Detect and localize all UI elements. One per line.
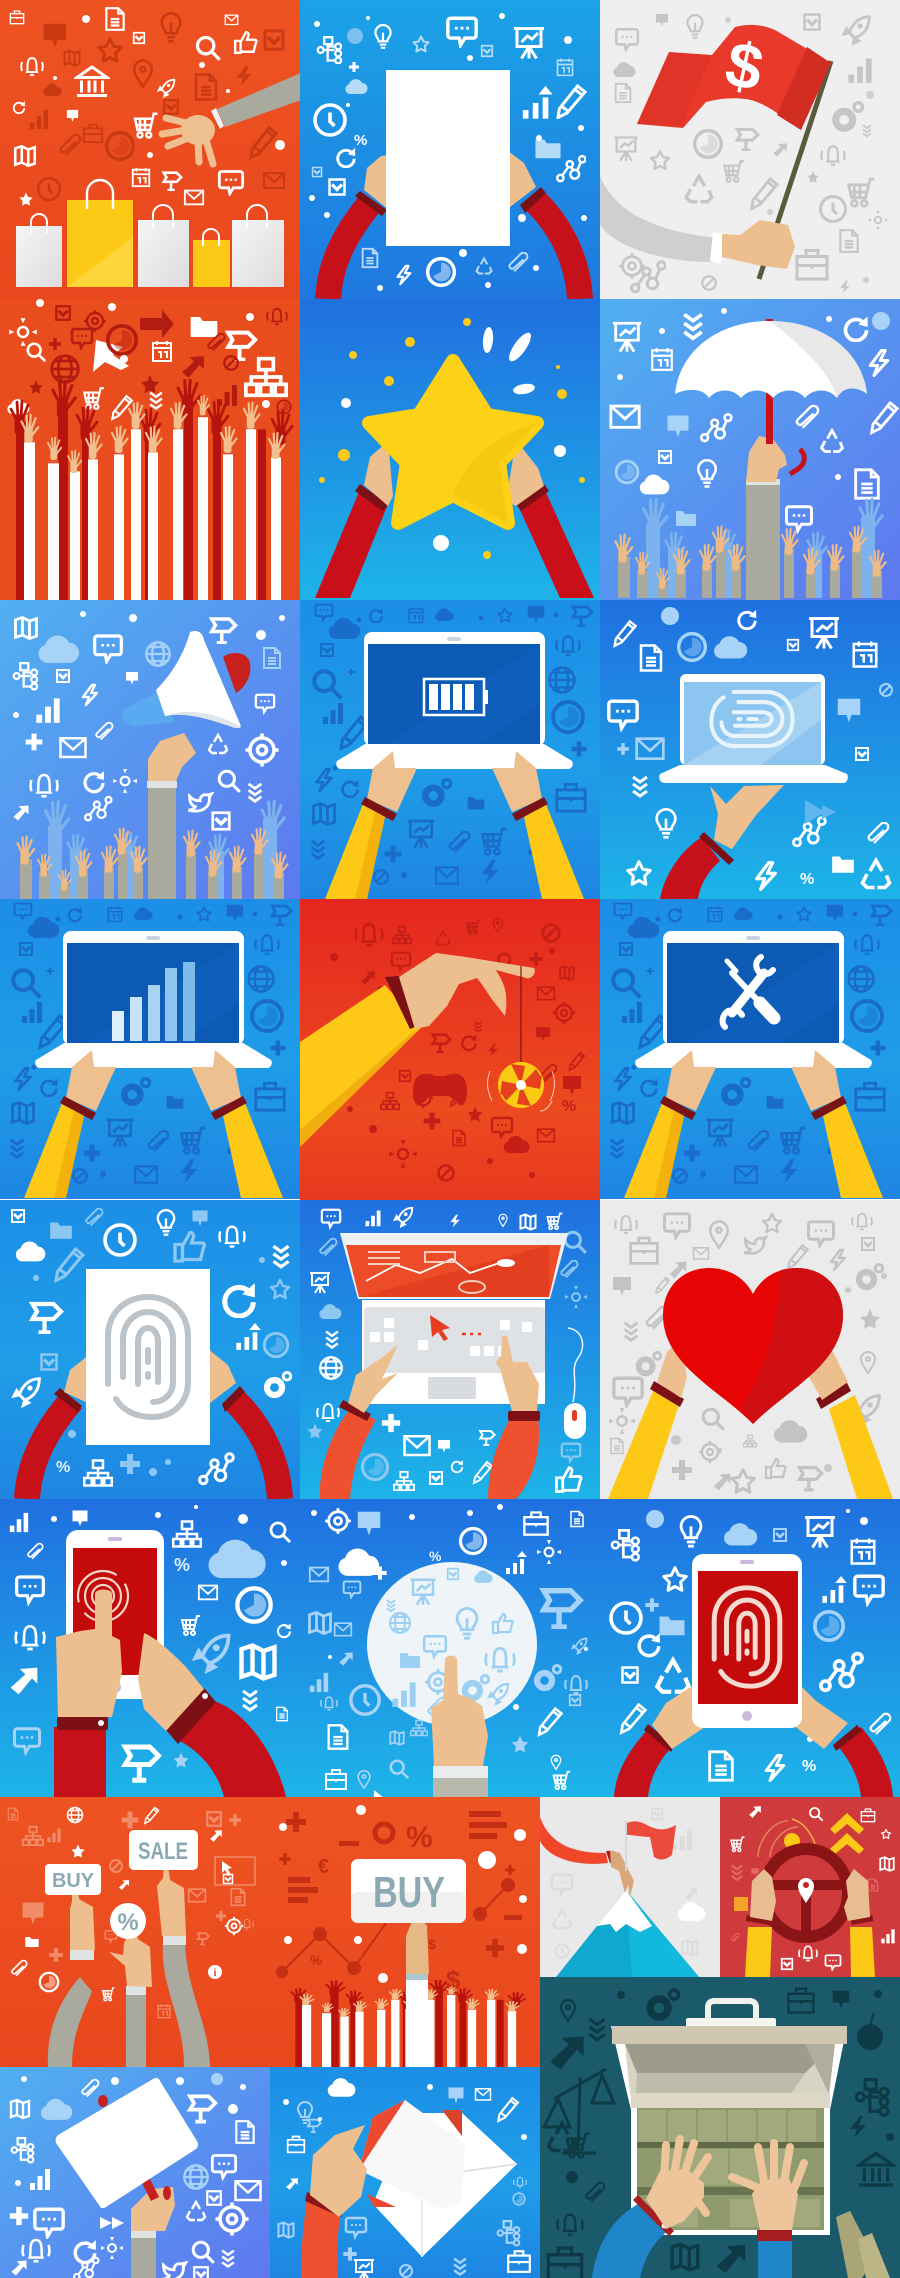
arm: right sleeve [506, 440, 594, 598]
panel: envelope [270, 2067, 540, 2278]
icons: white shopping motifs [10, 8, 256, 206]
text: symbols: % [406, 1821, 433, 1854]
icon: megaphone [122, 631, 250, 728]
arm: right hand [138, 1633, 286, 1797]
laptop screen [340, 1233, 568, 1299]
icons: white motifs [10, 1510, 291, 1780]
icons: dark shopping motifs [30, 13, 284, 200]
arm: right with hand [488, 1336, 540, 1499]
icons: white motifs [12, 1808, 243, 2001]
panel: globe of icons: % [429, 1548, 442, 1564]
panel: megaphone [0, 600, 300, 899]
panel: shopping bags on orange [0, 0, 300, 299]
icon: lid interior [611, 2026, 847, 2110]
arm: percent hand [109, 1925, 152, 2067]
paper [386, 70, 510, 246]
arm: hand holding sign [131, 2186, 175, 2278]
arm: buy hand [48, 1875, 95, 2067]
icon: shopping bags [16, 180, 284, 287]
icons: light motifs [552, 1809, 698, 1958]
yo-yo string [520, 966, 522, 1064]
money rows [638, 2110, 820, 2227]
icons: grey motifs [613, 14, 887, 293]
icon: game controller [413, 1074, 467, 1105]
arm: holding megaphone [147, 733, 196, 900]
icons: dark symbols [279, 1812, 515, 1957]
sign: BUY: BUY [373, 1868, 445, 1917]
icon: bomb [857, 2013, 883, 2050]
sign: BUY [45, 1864, 101, 1895]
panel: blank paper held up [300, 0, 600, 299]
icon: heart [663, 1268, 843, 1424]
arm: pointing hand [406, 1896, 429, 2067]
sign: BUY: BUY [52, 1870, 95, 1892]
arm: right hand [732, 2143, 804, 2278]
panel: buy and sale signs [0, 1797, 270, 2067]
arm: red-orange sleeve and hand [301, 2125, 367, 2278]
hand [399, 953, 535, 1029]
icon: yellow chevrons [830, 1813, 864, 1854]
laptop with hands [11, 904, 291, 1198]
icons: white business motifs [315, 18, 585, 285]
icons: white motifs [325, 1508, 583, 1789]
text: symbols: % [310, 1952, 323, 1968]
arm: right sleeve [788, 1681, 893, 1797]
panel: yo-yo on red: % [562, 1098, 576, 1115]
laptop [659, 674, 848, 783]
arm: yellow sleeve [300, 976, 425, 1147]
arm: hand holding umbrella [746, 436, 787, 600]
arm: left with hand [320, 1345, 398, 1499]
icon: flag [626, 1821, 676, 1871]
panel: flag with dollar sign [600, 0, 900, 299]
icons: dark motifs [29, 306, 291, 414]
arm: left red sleeve [328, 155, 389, 299]
icon: location pin [798, 1878, 814, 1903]
panel: yo-yo on red [300, 899, 600, 1200]
icon: smartphone [66, 1530, 164, 1699]
icons: white motifs [7, 317, 286, 419]
panel: blank paper held up: % [354, 132, 367, 149]
icon: fingerprint [711, 692, 793, 746]
arm: right red sleeve [508, 151, 580, 299]
arm: right red sleeve [208, 1349, 280, 1499]
panel: buy and sale signs: i [214, 1968, 217, 1979]
panel: phone touch [0, 1499, 300, 1797]
crowd: raised hands [11, 379, 292, 600]
sign: SALE: SALE [138, 1838, 188, 1865]
icons: dark red motifs [356, 918, 584, 1180]
icon: mountain [556, 1890, 699, 1977]
icons: white motifs [611, 314, 897, 530]
text: symbols [310, 1821, 461, 1995]
laptop base [362, 1300, 545, 1404]
icon: envelope back [373, 2110, 517, 2257]
panel: briefcase of money [540, 1977, 900, 2278]
icon: circle of light-blue icons [367, 1562, 537, 1736]
sign: percent bubble: % [117, 1909, 139, 1936]
text: symbols: $ [428, 1936, 436, 1952]
arm: right yellow [844, 1869, 875, 1977]
arm: left red sleeve [27, 1354, 90, 1499]
panel: tablet fingerprint [600, 1499, 900, 1797]
arm: left sleeve [315, 441, 393, 598]
white bag mid [138, 205, 189, 287]
panel: globe of icons [300, 1499, 600, 1797]
icon: steering wheel [764, 1849, 848, 1937]
icons: white motifs [10, 2080, 261, 2278]
icon: yo-yo [488, 1062, 554, 1111]
panel: tablet fingerprint: % [802, 1758, 816, 1775]
arm: sale hand [157, 1866, 210, 2067]
icons: dark motifs [548, 1989, 893, 2278]
panel: star held up [300, 299, 600, 600]
icon: battery [424, 679, 488, 715]
sign: BUY [351, 1859, 466, 1923]
confetti [319, 318, 585, 559]
panel: laptop battery [300, 600, 600, 899]
panel: laptop from above [300, 1200, 600, 1499]
paper [86, 1269, 210, 1445]
icon: mouse [564, 1403, 586, 1439]
arm: right yellow sleeve [804, 1338, 893, 1499]
icon: tablet [692, 1554, 802, 1728]
text: symbols: $ [446, 1965, 461, 1995]
panel: laptop fingerprint: % [800, 871, 814, 888]
icon: sign stick [145, 2179, 155, 2199]
icons: white motifs [611, 1516, 890, 1780]
panel: laptop tools [600, 899, 900, 1199]
panel: laptop fingerprint [600, 600, 900, 899]
crowd: raised hands [18, 801, 288, 900]
arm: mouse cord [568, 1328, 583, 1402]
arm: pointing hand [431, 1656, 488, 1797]
arm: left yellow [745, 1869, 776, 1977]
white bag right [232, 205, 284, 287]
icons: white motifs [14, 618, 278, 829]
line chart [276, 1878, 515, 1978]
panel: paper with fingerprint: % [56, 1459, 70, 1476]
icon: grey fingerprint [108, 1297, 188, 1417]
panel: held blank sign [0, 2067, 270, 2278]
icon: orange dial [758, 1819, 818, 1857]
icon: fingerprint [714, 1588, 780, 1686]
arm: red sleeve and hand [540, 1817, 634, 1897]
icon: big star [369, 361, 537, 523]
icon: scales [544, 2069, 614, 2153]
icon: crossed wrench and screwdriver [723, 957, 774, 1027]
icon: touch rings [78, 1571, 128, 1621]
panel: paper with fingerprint [0, 1200, 300, 1499]
arm: left sleeve [614, 1681, 714, 1797]
arm: grey sleeve and fist [596, 165, 795, 269]
arm: left yellow sleeve [608, 1338, 687, 1499]
crowd: raised hands [616, 499, 886, 598]
bar chart [112, 962, 195, 1041]
arm: left hand [592, 2139, 708, 2278]
white bag left [16, 214, 62, 287]
laptop with hands [611, 904, 891, 1198]
sign: percent bubble [110, 1903, 146, 1939]
text: dollar sign: $ [720, 27, 769, 105]
icon: money bills [836, 2211, 890, 2278]
yellow bag small [193, 229, 230, 287]
crowd: raised hands [291, 1980, 525, 2067]
laptop with hands [312, 604, 592, 899]
arm: left touching hand [54, 1590, 122, 1797]
icon: flag pole [759, 61, 831, 279]
icons: white motifs [609, 610, 890, 889]
sign: SALE [129, 1830, 198, 1870]
icon: blank sign [56, 2078, 198, 2208]
panel: phone touch: % [174, 1555, 190, 1575]
icon: case handle [708, 2001, 756, 2021]
icons: grey motifs [609, 1214, 883, 1492]
icons: white motifs [12, 1210, 291, 1486]
panel: umbrella over crowd [600, 299, 900, 600]
panel: laptop chart [0, 899, 300, 1199]
icons: white motifs [286, 2078, 530, 2278]
arm: hand under laptop [660, 785, 784, 899]
icons: light motifs [731, 1806, 895, 1970]
arm: reaching hand [162, 73, 301, 164]
icon: letter [359, 2100, 465, 2208]
text: symbols: € [318, 1856, 329, 1878]
panel: buy button with chart [270, 1797, 540, 2067]
panel: heart held up [600, 1200, 900, 1499]
icon: red flag [637, 25, 831, 130]
icon: case body [631, 2093, 830, 2235]
yellow bag tall [67, 180, 133, 287]
panel: steering wheel [720, 1797, 900, 1977]
icon: cloud [678, 1902, 705, 1921]
icon: umbrella [675, 319, 867, 474]
panel: summit flag [540, 1797, 720, 1977]
icons: white motifs [310, 1208, 581, 1492]
panel: raised hands on orange [0, 299, 300, 600]
